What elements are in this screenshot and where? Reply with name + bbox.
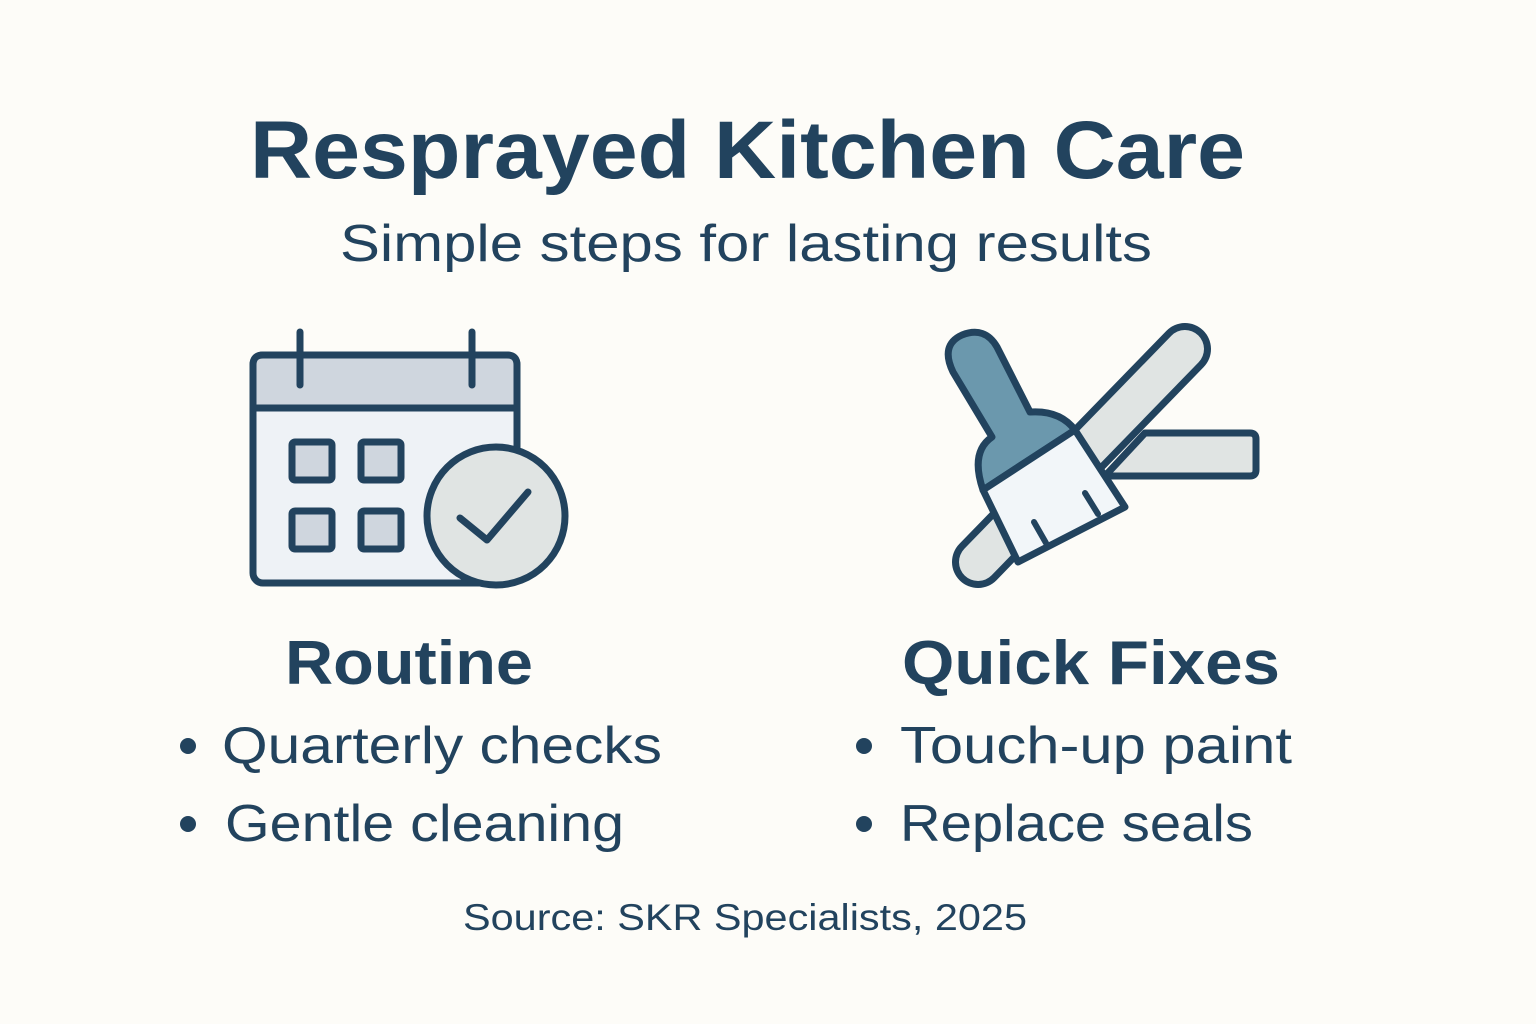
list: routine: Quarterly checks <box>222 717 662 775</box>
icon: paintbrush and scrapers <box>948 332 1256 562</box>
heading: Quick Fixes: Quick Fixes <box>902 629 1280 698</box>
source: Source: SKR Specialists, 2025 <box>463 897 1027 938</box>
list: routine: Gentle cleaning <box>225 795 624 853</box>
title: Resprayed Kitchen Care <box>250 105 1245 196</box>
list: quick fixes <box>856 717 1293 853</box>
heading: Routine: Routine <box>285 629 533 698</box>
list: quick fixes: Touch-up paint <box>900 717 1293 775</box>
list: quick fixes: Replace seals <box>900 795 1253 853</box>
list: routine <box>180 717 662 853</box>
icon: calendar with check <box>253 332 565 585</box>
subtitle: Simple steps for lasting results <box>340 215 1152 273</box>
